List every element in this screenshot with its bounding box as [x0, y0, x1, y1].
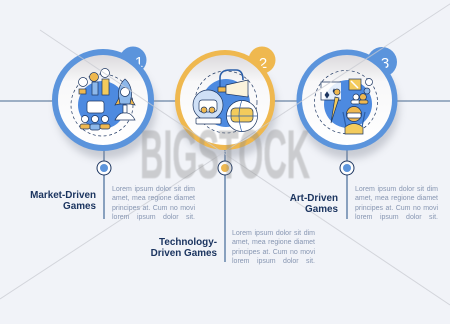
icon: vr artist — [343, 106, 365, 134]
text block 1: Lorem ipsum dolor sit dim amet, mea regione diamet principes at. Cum no movi lorem ipsum dolor sit. — [112, 186, 195, 221]
label: market-driven games: Market-Driven — [30, 190, 96, 201]
vertical connectors — [104, 150, 347, 262]
label: technology-driven games: Driven Games — [151, 248, 217, 259]
circle 2: technology-driven — [175, 46, 277, 159]
icon: coins and bars — [78, 68, 110, 95]
label: art-driven games — [290, 193, 338, 215]
timeline line — [0, 100, 450, 102]
text block 2: Lorem ipsum dolor sit dim amet, mea regione diamet principes at. Cum no movi lorem ipsum dolor sit. — [232, 230, 315, 265]
label: technology-driven games — [151, 237, 217, 259]
icon: vr headset — [218, 70, 248, 97]
label: art-driven games: Games — [305, 204, 338, 215]
badge 1: 1 — [135, 54, 143, 71]
node 3 — [340, 161, 354, 175]
icon: tiles and people — [349, 78, 372, 104]
label: market-driven games: Games — [63, 201, 96, 212]
node 2 — [218, 161, 232, 175]
badge 3: 3 — [381, 55, 389, 72]
circle 3: art-driven — [296, 47, 399, 159]
icon: canvas and brush — [321, 82, 341, 123]
icon: rocket — [115, 79, 135, 120]
circle 1: market-driven — [52, 46, 156, 159]
label: art-driven games: Art-Driven — [290, 193, 338, 204]
icon: gamepad globe — [226, 100, 258, 132]
badge 2: 2 — [259, 55, 267, 72]
node 1 — [97, 161, 111, 175]
text block 3: Lorem ipsum dolor sit dim amet, mea regione diamet principes at. Cum no movi lorem ipsum dolor sit. — [355, 186, 438, 221]
label: market-driven games — [30, 190, 96, 212]
icon: gamepad and people — [80, 101, 110, 130]
icon: robot sphere — [193, 90, 223, 124]
label: technology-driven games: Technology- — [159, 237, 217, 248]
